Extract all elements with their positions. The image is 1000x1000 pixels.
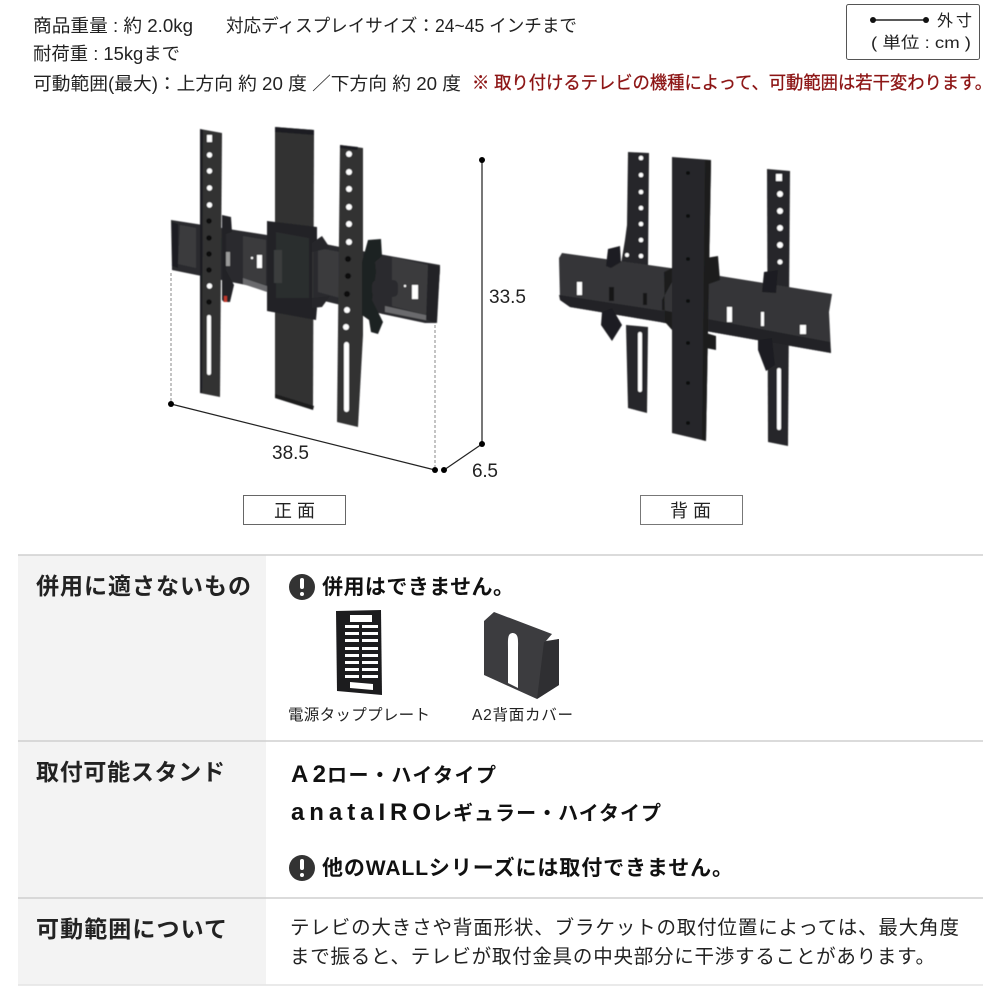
row heading: incompatible items: 併用に適さないもの	[36, 573, 251, 599]
label: front: 正面	[274, 501, 315, 521]
range of motion note: まで振ると、テレビが取付金具の中央部分に干渉することがあります。	[290, 946, 935, 968]
stand list: レギュラー・ハイタイプ	[432, 802, 661, 825]
crossbar	[559, 253, 832, 353]
center strip	[275, 127, 314, 407]
left plate	[620, 152, 649, 270]
dimension value: depth: 6.5	[472, 461, 498, 482]
dimension lines: front view	[168, 157, 485, 473]
warning: cannot combine: 併用はできません。	[322, 576, 514, 599]
label: back	[640, 496, 742, 524]
red note: ※ 取り付けるテレビの機種によって、可動範囲は若干変わります。	[472, 73, 992, 93]
warning: other WALL series: 他のWALLシリーズには取付できません。	[322, 856, 733, 880]
label: back: 背面	[670, 501, 711, 521]
range of motion note	[290, 916, 959, 968]
left label column	[18, 555, 266, 985]
caption: power strip plate: 電源タッププレート	[288, 706, 430, 724]
stand list: ロー・ハイタイプ	[327, 764, 496, 787]
caption: A2 back cover: A2背面カバー	[472, 706, 573, 724]
legend box: outer dimensions	[846, 4, 980, 60]
crossbar	[171, 220, 440, 323]
icon: A2 back cover	[484, 612, 559, 699]
stand list	[291, 761, 661, 826]
table divider rules	[18, 555, 983, 985]
clips	[601, 246, 778, 371]
icon: power strip plate	[336, 610, 382, 695]
specs text block: 耐荷重 : 15kgまで	[33, 44, 180, 64]
left plate	[200, 129, 222, 397]
specs text block: 対応ディスプレイサイズ：24~45 インチまで	[226, 16, 577, 36]
legend box: outer dimensions: ( 単位 : cm )	[871, 34, 971, 52]
label: front	[244, 496, 346, 524]
stand list: anataIRO	[291, 799, 431, 826]
knob	[362, 239, 383, 334]
specs text block: 商品重量 : 約 2.0kg	[33, 16, 193, 36]
right plate	[767, 169, 790, 446]
center block	[267, 221, 317, 320]
range of motion note: テレビの大きさや背面形状、ブラケットの取付位置によっては、最大角度	[290, 916, 959, 939]
row heading: range of motion: 可動範囲について	[36, 916, 227, 942]
dimension value: width: 38.5	[272, 443, 309, 464]
center strip	[672, 157, 711, 441]
legend box: outer dimensions: 外寸	[937, 12, 972, 30]
right plate	[337, 145, 363, 427]
back view bracket photo	[559, 152, 832, 446]
front view bracket photo	[171, 127, 440, 427]
stand list: A2	[291, 761, 326, 788]
specs text block: 可動範囲(最大)：上方向 約 20 度 ／下方向 約 20 度	[33, 74, 461, 94]
dimension value: height: 33.5	[489, 287, 526, 308]
specs text block	[33, 16, 577, 94]
row heading: compatible stands: 取付可能スタンド	[36, 759, 225, 785]
